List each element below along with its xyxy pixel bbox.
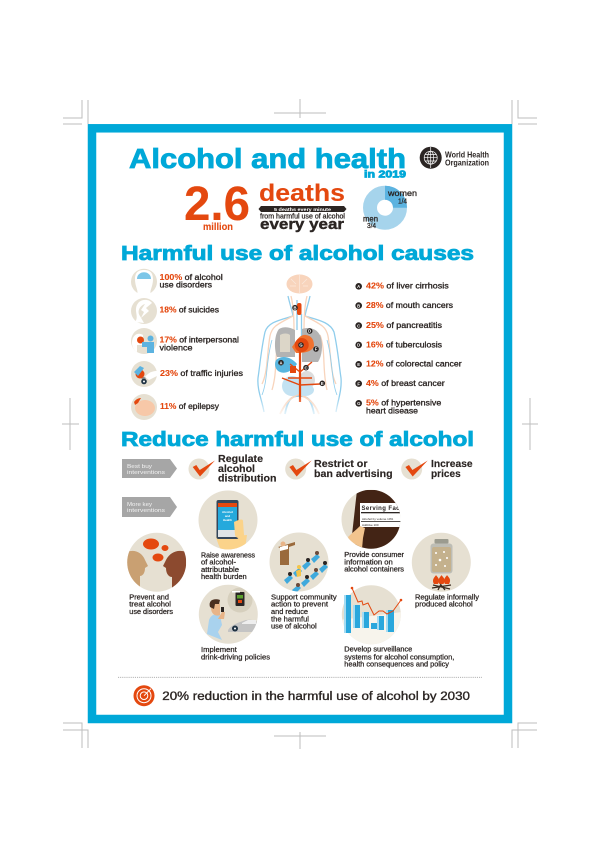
panel: alcohol-attributable injuries and disorders xyxy=(131,269,243,420)
icon: phone awareness xyxy=(198,490,258,556)
text: consumer information: information on xyxy=(344,558,393,566)
text: support community action xyxy=(271,593,337,631)
icon: WHO logo: World Health xyxy=(445,150,489,160)
deaths every year: deaths xyxy=(259,180,345,207)
icon: epilepsy brain xyxy=(131,394,157,420)
panel: diseases list xyxy=(355,282,462,415)
text: interpersonal violence xyxy=(160,336,239,352)
label arrow: more key interventions: More key xyxy=(127,502,152,508)
icon: interpersonal violence xyxy=(131,328,157,354)
icon: target xyxy=(134,685,154,706)
deaths every year xyxy=(258,180,346,233)
illustration: human body with organs xyxy=(250,274,350,420)
panel: diseases list: C xyxy=(357,323,360,328)
text: support community action: Support community xyxy=(271,593,337,601)
panel: diseases list: E xyxy=(357,362,360,367)
text: support community action: use of alcohol xyxy=(271,623,317,631)
text: drink-driving xyxy=(201,646,270,661)
text: suicides: 18% of suicides xyxy=(160,306,219,315)
text: surveillance: health consequences and policy xyxy=(344,661,449,669)
intervention: regulate distribution: alcohol xyxy=(218,464,255,475)
intervention: restrict advertising: Restrict or xyxy=(314,459,368,470)
icon: serving facts label: Alcohol by volume 10% xyxy=(362,517,394,521)
icon: surveillance bar chart xyxy=(340,585,402,645)
text: drink-driving: drink-driving policies xyxy=(201,653,270,661)
label arrow: best buy interventions xyxy=(122,459,177,478)
text: surveillance xyxy=(344,646,454,669)
panel: diseases list: A xyxy=(357,284,360,289)
icon: drink-driving xyxy=(199,585,258,644)
icon: prevent and treat, two heads xyxy=(127,533,187,596)
text: alcohol use disorders: 100% of alcohol xyxy=(160,273,223,282)
intervention: restrict advertising: ban advertising xyxy=(314,469,393,480)
text: hypertensive heart disease: heart disease xyxy=(366,406,418,415)
icon: community action xyxy=(270,532,328,594)
icon: phone awareness: Alcohol xyxy=(222,510,233,514)
intervention: increase prices xyxy=(401,458,473,480)
title: in 2019 xyxy=(364,170,407,180)
text: interpersonal violence: violence xyxy=(160,343,192,352)
intervention: increase prices: prices xyxy=(431,469,461,480)
title: Alcohol and health xyxy=(129,143,406,174)
text: alcohol use disorders: use disorders xyxy=(160,281,212,290)
intervention: regulate distribution: distribution xyxy=(218,474,276,485)
icon: WHO logo xyxy=(420,147,489,169)
text: support community action: and reduce xyxy=(271,608,308,616)
text: interpersonal violence: 17% of interpersonal xyxy=(160,336,239,345)
text: hypertensive heart disease: 5% of hypertensive xyxy=(366,399,441,408)
intervention: restrict advertising xyxy=(285,458,393,480)
text: consumer information xyxy=(344,551,405,574)
markers on body xyxy=(278,305,325,386)
icon: suicides head xyxy=(131,298,157,324)
text: pancreatitis: 25% of pancreatitis xyxy=(366,321,442,330)
icon: serving facts label: Additive 100 xyxy=(362,523,379,527)
panel: diseases list: G xyxy=(357,401,360,406)
poster frame xyxy=(92,128,508,719)
text: liver cirrhosis: 42% of liver cirrhosis xyxy=(366,282,449,291)
markers on body: D xyxy=(308,329,311,334)
chart: deaths by sex donut: 1/4 xyxy=(398,198,407,206)
big number: 2.6 million: million xyxy=(203,222,233,233)
text: surveillance: Develop surveillance xyxy=(344,646,412,654)
panel: diseases list: D xyxy=(357,343,360,348)
icon: serving facts label: Serving Fac xyxy=(362,506,400,512)
heading: reduce harmful use: Reduce harmful use of alcohol xyxy=(121,429,474,451)
intervention: increase prices: Increase xyxy=(431,459,473,470)
icon: traffic injuries xyxy=(131,361,157,387)
text: tuberculosis: 16% of tuberculosis xyxy=(366,340,442,349)
text: raise awareness: of alcohol- xyxy=(201,559,237,567)
text: support community action: the harmful xyxy=(271,615,309,623)
text: mouth cancers: 28% of mouth cancers xyxy=(366,301,453,310)
chart: deaths by sex donut xyxy=(363,186,417,230)
text: surveillance: systems for alcohol consumption, xyxy=(344,653,454,661)
markers on body: B xyxy=(293,305,297,310)
text: raise awareness: health burden xyxy=(201,573,247,581)
deaths every year: 5 deaths every minute xyxy=(274,207,332,212)
text: traffic injuries: 23% of traffic injuries xyxy=(160,369,243,378)
deaths every year: from harmful use of alcohol xyxy=(260,212,345,220)
markers on body: C xyxy=(304,365,308,370)
icon: WHO logo: Organization xyxy=(445,158,489,168)
chart: deaths by sex donut: men xyxy=(363,215,378,224)
heading: harmful use causes: Harmful use of alcohol causes xyxy=(121,243,474,265)
panel: diseases list: B xyxy=(357,303,360,308)
label arrow: best buy interventions: interventions xyxy=(127,470,165,476)
big number: 2.6 million: 2.6 xyxy=(184,178,250,231)
label arrow: best buy interventions: Best buy xyxy=(127,464,152,470)
text: raise awareness xyxy=(201,551,255,581)
chart: deaths by sex donut: women xyxy=(387,189,417,198)
panel: diseases list: F xyxy=(357,381,360,386)
text: regulate informally: Regulate informally xyxy=(415,593,479,601)
text: drink-driving: Implement xyxy=(201,646,237,654)
text: prevent and treat: use disorders xyxy=(129,608,173,616)
intervention: regulate distribution xyxy=(188,454,276,485)
goal: 20% reduction: 20% reduction in the harmful use of alcohol by 2030 xyxy=(162,691,470,703)
icon: alcohol use disorders head xyxy=(131,269,157,295)
label arrow: more key interventions xyxy=(122,497,177,517)
text: prevent and treat: Prevent and xyxy=(129,593,169,601)
text: colorectal cancer: 12% of colorectal cancer xyxy=(366,360,462,369)
chart: deaths by sex donut: 3/4 xyxy=(367,222,376,230)
text: hypertensive heart disease xyxy=(366,399,441,415)
text: alcohol use disorders xyxy=(160,273,223,290)
text: prevent and treat: treat alcohol xyxy=(129,601,171,609)
markers on body: F xyxy=(315,347,318,352)
markers on body: G xyxy=(299,343,303,348)
markers on body: E xyxy=(321,381,324,386)
text: regulate informally: produced alcohol xyxy=(415,601,473,609)
text: raise awareness: Raise awareness xyxy=(201,551,255,559)
label arrow: more key interventions: interventions xyxy=(127,508,165,514)
markers on body: A xyxy=(279,360,283,365)
text: raise awareness: attributable xyxy=(201,566,239,574)
deaths every year: every year xyxy=(260,216,344,233)
text: epilepsy: 11% of epilepsy xyxy=(160,402,219,411)
text: consumer information: alcohol containers xyxy=(344,566,404,574)
icon: informal alcohol jar xyxy=(412,533,471,592)
intervention: regulate distribution: Regulate xyxy=(218,454,263,465)
text: regulate informally xyxy=(415,593,479,609)
text: breast cancer: 4% of breast cancer xyxy=(366,379,445,388)
icon: phone awareness: and xyxy=(225,514,230,518)
text: support community action: action to prevent xyxy=(271,601,328,609)
text: prevent and treat xyxy=(129,593,173,616)
icon: serving facts label xyxy=(342,490,401,550)
icon: phone awareness: Health xyxy=(223,518,232,522)
text: consumer information: Provide consumer xyxy=(344,551,405,559)
